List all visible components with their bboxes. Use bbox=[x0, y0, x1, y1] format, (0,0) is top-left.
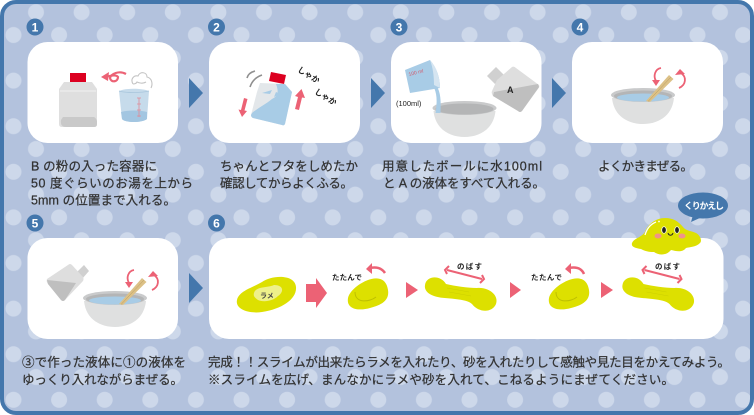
text: step 4: よくかきまぜる。 bbox=[598, 160, 693, 174]
icon: stretch arrow bbox=[445, 266, 484, 283]
text: step 6 bbox=[208, 354, 730, 387]
text: step 1: 5mm の位置まで入れる。 bbox=[31, 194, 176, 208]
label: たたんで: たたんで bbox=[332, 272, 362, 282]
icon: folded slime bbox=[549, 278, 589, 309]
panel: step 1 bbox=[26, 18, 178, 143]
icon: steam cloud bbox=[132, 73, 152, 88]
icon: bag A: A bbox=[507, 85, 514, 95]
text: step 1: B の粉の入った容器に bbox=[31, 158, 157, 174]
step number 4: 4 bbox=[577, 20, 584, 34]
arrow: small triangle bbox=[406, 282, 418, 298]
icon: down arrow bbox=[238, 98, 248, 117]
panel: step 6 bbox=[208, 214, 724, 339]
icon: tilted bottle being shaken bbox=[251, 83, 292, 125]
text: step 3 bbox=[382, 160, 545, 190]
step number 4 bbox=[572, 18, 588, 36]
icon: measuring cup pouring bbox=[405, 60, 440, 93]
icon: beaker of hot water bbox=[119, 89, 149, 122]
arrow: small triangle bbox=[510, 282, 521, 298]
text: step 5: ゆっくり入れながらまぜる。 bbox=[22, 372, 183, 387]
icon: up arrow bbox=[295, 89, 305, 110]
arrow: step 2 to 3 bbox=[371, 78, 385, 108]
icon: slime with glitter bbox=[237, 277, 296, 312]
text: step 1: 50 度ぐらいのお湯を上から bbox=[31, 176, 193, 190]
step number 3 bbox=[390, 18, 408, 36]
step number 5: 5 bbox=[32, 216, 39, 230]
icon: slime with glitter: ラメ bbox=[260, 292, 274, 300]
text: step 2: ちゃんとフタをしめたか bbox=[220, 160, 358, 174]
text: step 5: ③で作った液体に①の液体を bbox=[22, 356, 186, 370]
callout: くりかえし: くりかえし bbox=[684, 201, 724, 211]
icon: bowl with water and chopsticks bbox=[83, 278, 147, 327]
label: しゃか: しゃか bbox=[313, 87, 338, 107]
text: step 3: と A の液体をすべて入れる。 bbox=[383, 176, 545, 190]
arrow: step 1 to 2 bbox=[189, 78, 203, 108]
icon: bowl bbox=[432, 101, 496, 137]
icon: folded slime bbox=[348, 278, 388, 309]
icon: bag pouring bbox=[47, 264, 89, 301]
text: step 1 bbox=[31, 158, 193, 208]
arrow: step 3 to 4 bbox=[552, 78, 566, 108]
label: 100ml: (100ml) bbox=[396, 99, 422, 108]
icon: bowl with water and chopsticks bbox=[611, 75, 675, 124]
icon: stretch arrow bbox=[642, 266, 682, 283]
label: のばす: のばす bbox=[457, 261, 482, 271]
icon: water stream bbox=[433, 85, 441, 113]
icon: stir arrows bbox=[125, 270, 158, 290]
panel: step 5 bbox=[26, 214, 178, 339]
text: step 6: ※スライムを広げ、まんなかにラメや砂を入れて、こねるようにまぜてください。 bbox=[208, 373, 674, 387]
panel: step 4 bbox=[572, 18, 723, 143]
icon: fold arrow bbox=[565, 263, 584, 274]
callout: くりかえし bbox=[678, 192, 728, 222]
arrow: small triangle bbox=[601, 282, 613, 298]
text: step 3: 用意したボールに水100ml bbox=[382, 160, 542, 174]
icon: pour arrow bbox=[101, 72, 126, 81]
arrow: pink block arrow bbox=[306, 278, 327, 308]
icon: motion lines bbox=[247, 71, 262, 87]
text: step 6: 完成！！スライムが出来たらラメを入れたり、砂を入れたりして感触や見た目をかえてみよう。 bbox=[208, 354, 730, 370]
icon: bag A bbox=[487, 67, 539, 112]
text: step 5 bbox=[22, 356, 186, 387]
text: step 2: 確認してからよくふる。 bbox=[220, 176, 353, 190]
step number 2: 2 bbox=[213, 20, 220, 34]
label: しゃか: しゃか bbox=[296, 65, 321, 85]
icon: measuring cup pouring: 100 ml bbox=[408, 68, 424, 78]
panel: step 2 bbox=[208, 18, 360, 143]
label: たたんで: たたんで bbox=[531, 272, 562, 282]
label: のばす: のばす bbox=[655, 261, 680, 271]
step number 5 bbox=[26, 214, 44, 232]
icon: fold arrow bbox=[366, 263, 385, 274]
icon: stretched slime bbox=[425, 277, 497, 311]
step number 6: 6 bbox=[213, 216, 220, 230]
text: step 2 bbox=[220, 160, 358, 190]
arrow: step 5 to 6 bbox=[189, 273, 203, 303]
step number 2 bbox=[208, 18, 225, 36]
icon: stir arrows bbox=[652, 68, 685, 88]
step number 3: 3 bbox=[396, 20, 403, 34]
icon: red cap bbox=[269, 72, 286, 84]
step number 1 bbox=[26, 18, 44, 36]
icon: stretched slime bbox=[622, 277, 694, 311]
mascot: slime character bbox=[632, 218, 701, 254]
panel: step 3 bbox=[390, 18, 542, 143]
step number 6 bbox=[208, 214, 225, 232]
icon: bottle with red cap bbox=[59, 73, 97, 127]
step number 1: 1 bbox=[32, 20, 39, 34]
